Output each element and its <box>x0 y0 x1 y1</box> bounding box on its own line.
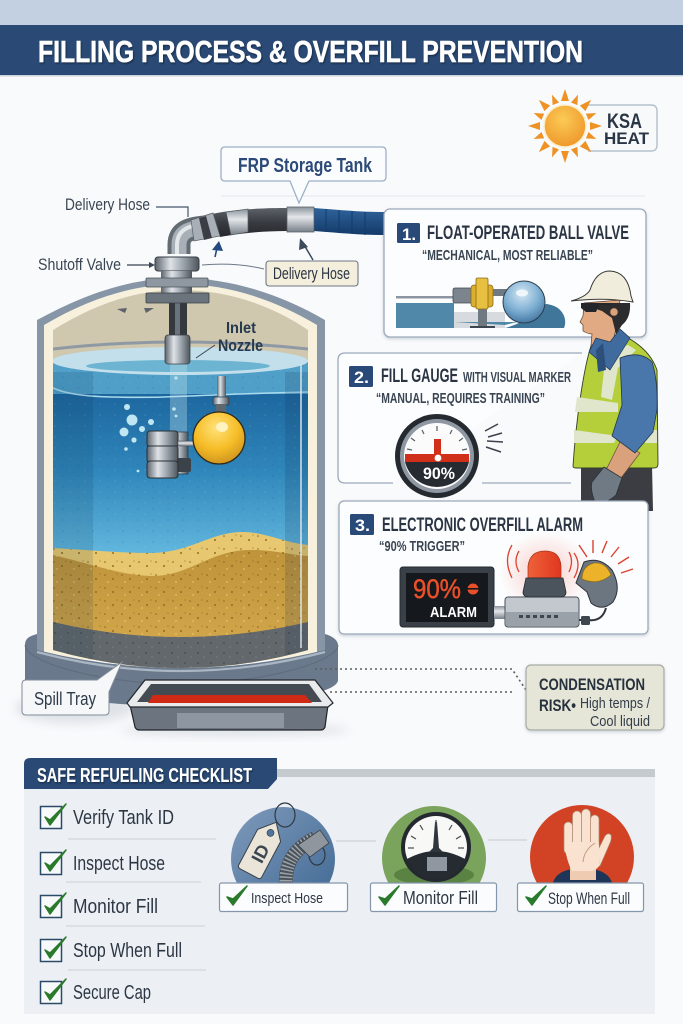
alarm display: 90% <box>413 574 461 604</box>
subtitle 1: “MECHANICAL, MOST RELIABLE” <box>422 247 593 264</box>
checklist item: monitor fill: Monitor Fill <box>73 896 158 918</box>
checklist item: inspect hose <box>40 850 165 875</box>
dark corrugated hose <box>212 208 288 237</box>
arrow: blue up <box>212 241 223 257</box>
subtitle 3: “90% TRIGGER” <box>379 538 465 555</box>
float valve body <box>147 431 194 478</box>
icon: gauge vibration marks <box>485 424 503 452</box>
hose <box>286 838 315 885</box>
blue hose <box>314 208 384 235</box>
panel: fill gauge <box>338 353 582 498</box>
label: delivery hose box <box>202 261 358 286</box>
number badge 1 <box>397 223 420 244</box>
top band <box>0 0 683 25</box>
label: inlet nozzle <box>196 320 263 358</box>
panel: safe refueling checklist <box>24 758 655 1014</box>
icon: gauge 90%: 90% <box>423 464 455 483</box>
icon: stop hand <box>530 805 634 909</box>
shirt sleeve <box>612 355 657 453</box>
hose collars <box>287 207 314 232</box>
red liquid <box>148 695 312 703</box>
icon: gauge 90% <box>395 414 479 498</box>
badge text: KSA <box>607 110 642 133</box>
icon: horn sounder <box>576 540 633 625</box>
dome bolts <box>117 308 154 313</box>
shutoff valve <box>155 257 199 271</box>
tank interior <box>52 285 308 692</box>
label: inlet nozzle: Nozzle <box>218 336 263 355</box>
tank shell <box>37 278 325 660</box>
heading 3: ELECTRONIC OVERFILL ALARM <box>382 515 583 536</box>
icon: alarm beacon <box>494 532 591 627</box>
divider <box>221 195 645 197</box>
shirt collar <box>589 329 630 370</box>
trousers <box>581 465 653 511</box>
heading 2: WITH VISUAL MARKER <box>463 369 571 386</box>
hair <box>593 303 630 334</box>
KSA heat badge: HEAT <box>604 129 650 148</box>
checklist item: stop when full: Stop When Full <box>73 940 182 962</box>
checklist item: monitor fill <box>40 893 158 918</box>
waterline <box>53 388 308 397</box>
number badge 3 <box>350 514 374 535</box>
horn sound lines <box>579 540 633 573</box>
number badge 2: 2. <box>354 368 369 387</box>
panel: float-operated ball valve <box>384 209 646 337</box>
worker <box>571 271 658 511</box>
badge: inspect hose <box>220 883 348 912</box>
callout: FRP storage tank: FRP Storage Tank <box>238 155 373 177</box>
number badge 1: 1. <box>402 225 416 244</box>
heading 2 <box>381 366 571 387</box>
callout: condensation risk: High temps / <box>580 695 651 712</box>
sunglasses <box>581 303 611 312</box>
tank liner <box>44 284 317 660</box>
icon: ID tag and hose <box>231 803 335 911</box>
callout: FRP storage tank <box>221 147 386 203</box>
sand layer <box>53 532 308 680</box>
checklist item: secure cap: Secure Cap <box>73 982 151 1004</box>
spill tray <box>120 680 350 736</box>
badge: stop when full: Stop When Full <box>548 889 630 908</box>
badge: stop when full <box>518 883 644 912</box>
number badge 3: 3. <box>355 516 370 535</box>
number badge 2 <box>349 366 373 387</box>
label: delivery hose: Delivery Hose <box>65 195 150 214</box>
checklist item: secure cap <box>40 979 151 1004</box>
alarm display <box>400 567 494 627</box>
checklist item: inspect hose: Inspect Hose <box>73 853 165 875</box>
badge: monitor fill <box>370 883 496 912</box>
forearm <box>606 442 640 478</box>
alarm display: ALARM <box>430 604 477 621</box>
checklist item: verify tank ID: Verify Tank ID <box>73 807 174 829</box>
elbow pipe <box>179 227 206 254</box>
label: inlet nozzle: Inlet <box>226 320 257 337</box>
checklist item: stop when full <box>40 937 182 962</box>
gravel layer <box>53 622 308 668</box>
ID tag: ID <box>248 841 274 866</box>
title banner <box>0 25 683 76</box>
heading 2: FILL GAUGE <box>381 366 458 387</box>
hard hat <box>571 271 633 302</box>
glove <box>591 467 622 503</box>
icon: ball valve <box>396 278 565 328</box>
hose assembly <box>146 207 384 303</box>
KSA heat badge <box>528 89 657 163</box>
vest reflective strips <box>574 345 657 443</box>
inlet nozzle <box>165 335 190 364</box>
water above level <box>53 362 308 394</box>
water surface <box>52 347 308 375</box>
inner pipe <box>170 362 187 474</box>
callout: condensation risk: CONDENSATION <box>539 675 645 694</box>
badge: monitor fill: Monitor Fill <box>403 888 478 908</box>
bubbles <box>120 376 178 472</box>
water body <box>53 394 308 564</box>
storage tank <box>37 278 325 692</box>
label: spill tray <box>22 662 122 715</box>
panel: electronic overfill alarm <box>339 501 648 634</box>
inlet nozzle pipe <box>169 300 187 336</box>
label: spill tray: Spill Tray <box>34 689 96 709</box>
icon: monitor gauge <box>382 806 486 910</box>
float ball <box>193 376 245 464</box>
side shading <box>53 372 93 660</box>
vest <box>573 338 658 468</box>
subtitle 2: “MANUAL, REQUIRES TRAINING” <box>376 390 545 407</box>
spill tray base <box>15 634 338 724</box>
callout: condensation risk <box>526 665 664 730</box>
neck and face <box>580 300 620 345</box>
label: shutoff valve: Shutoff Valve <box>38 255 121 274</box>
callout: condensation risk: Cool liquid <box>590 713 650 730</box>
checklist header <box>24 758 277 789</box>
checklist header: SAFE REFUELING CHECKLIST <box>37 765 252 787</box>
badge: inspect hose: Inspect Hose <box>251 890 323 907</box>
dotted leader lines <box>315 669 526 692</box>
icon: sun <box>528 89 602 163</box>
checklist item: verify tank ID <box>40 804 174 829</box>
label: delivery hose box: Delivery Hose <box>273 264 350 283</box>
callout: condensation risk: RISK• <box>539 696 576 715</box>
alarm sound waves <box>508 545 578 578</box>
arrow: to hose <box>299 238 313 260</box>
